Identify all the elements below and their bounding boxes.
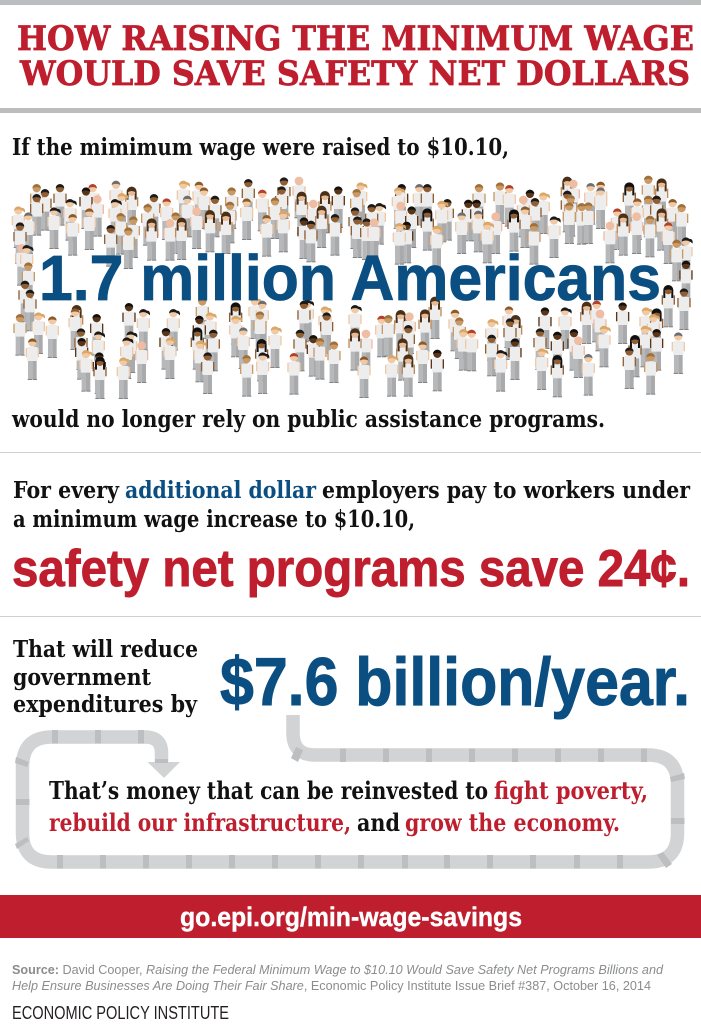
statement: additional dollar — [13, 477, 691, 533]
text: money can be reinvested: rebuild our infrastructure, — [49, 808, 351, 837]
text: money can be reinvested — [49, 776, 648, 837]
text: money can be reinvested: fight poverty, — [494, 776, 648, 805]
source citation: Source: David Cooper, Raising the Federal Minimum Wage to $10.10 Would Save Safety Net Programs Billions and — [12, 963, 664, 977]
statement: additional dollar: For every — [13, 477, 120, 504]
source citation — [12, 963, 664, 993]
label: government expenditures: government — [13, 664, 151, 691]
text: money can be reinvested: and — [357, 808, 400, 837]
crowd of people illustration — [12, 176, 693, 399]
statement: additional dollar: a minimum wage increase to $10.10, — [13, 506, 415, 533]
people: left half — [12, 177, 345, 399]
text: money can be reinvested: That’s money that can be reinvested to — [49, 776, 488, 805]
red banner with link: go.epi.org/min-wage-savings — [180, 902, 522, 932]
organization name: ECONOMIC POLICY INSTITUTE — [12, 1003, 229, 1023]
arrow: looping road around reinvestment text — [15, 715, 685, 868]
big number: 1.7 million Americans: 1.7 million Americans — [39, 242, 661, 314]
label: government expenditures — [13, 636, 198, 718]
label: government expenditures: That will reduce — [13, 636, 198, 663]
label: government expenditures: expenditures by — [13, 691, 198, 718]
intro sentence continued: would no longer rely on public assistance programs. — [11, 406, 605, 433]
statement: additional dollar: additional dollar — [125, 477, 317, 504]
text: money can be reinvested: grow the economy. — [405, 808, 620, 837]
intro sentence: If the mimimum wage were raised to $10.10, — [12, 134, 509, 161]
red banner with link — [0, 895, 701, 938]
people: right half — [348, 176, 693, 398]
source citation: Help Ensure Businesses Are Doing Their Fair Share , Economic Policy Institute Issue Brief #387, October 16, 2014 — [12, 979, 651, 993]
title — [17, 19, 694, 94]
